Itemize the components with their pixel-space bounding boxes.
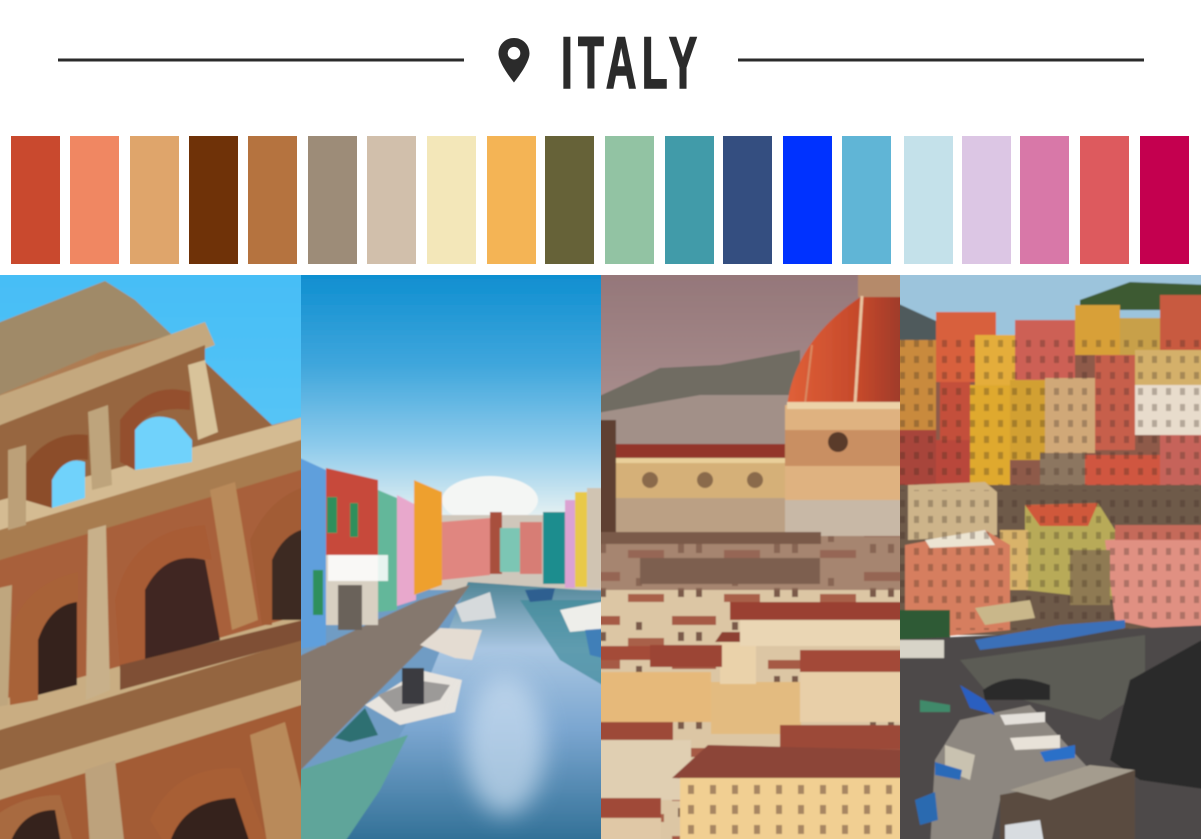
cathedral nave	[615, 445, 790, 535]
boats	[365, 670, 462, 725]
pavement	[291, 585, 470, 780]
arch openings	[120, 389, 190, 470]
large foreground house	[672, 745, 910, 786]
water reflection	[465, 675, 545, 815]
photo: Burano canal	[301, 275, 601, 839]
photo: Manarola village	[900, 275, 1201, 839]
mid row houses	[890, 485, 1201, 635]
columns	[188, 360, 218, 440]
houses left	[291, 454, 326, 650]
photo: Florence cathedral	[601, 275, 900, 839]
heading: ITALY	[561, 22, 702, 104]
colour palette swatches	[11, 136, 1189, 264]
icon: location pin	[498, 38, 530, 82]
photo: Colosseum	[0, 275, 301, 839]
dome	[785, 405, 910, 535]
foreground buildings	[591, 672, 711, 722]
harbour	[890, 625, 1201, 839]
canal water	[335, 582, 611, 839]
town	[591, 530, 910, 839]
title	[58, 22, 1144, 104]
top row houses	[890, 340, 1201, 490]
